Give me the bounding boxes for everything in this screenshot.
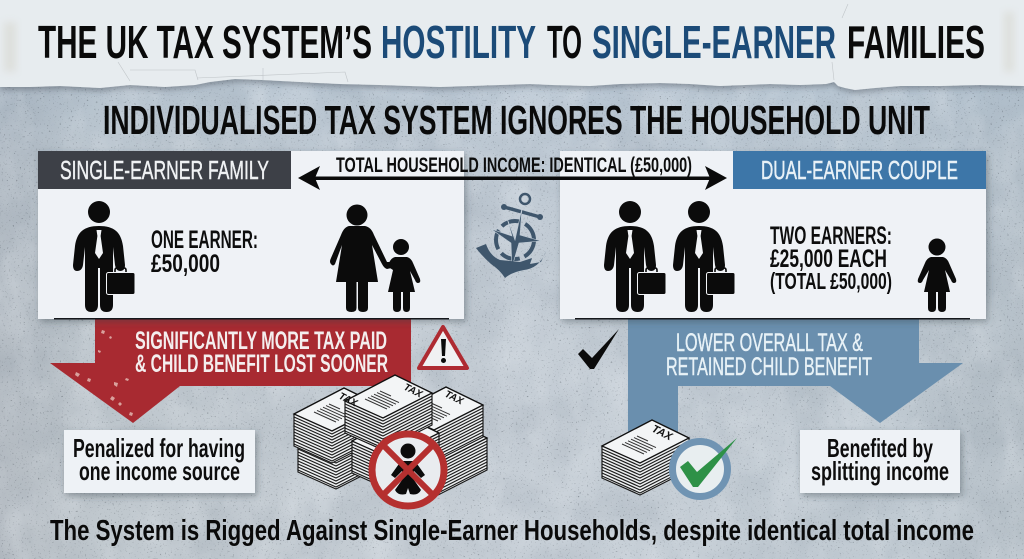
tax labels: TAX bbox=[402, 382, 425, 401]
icon: earner with briefcase bbox=[73, 201, 135, 312]
icon: child bbox=[918, 238, 956, 312]
tax labels bbox=[337, 382, 466, 410]
panel: single-earner family bbox=[38, 151, 464, 320]
icon: small tax stack with green check bbox=[602, 420, 737, 496]
callout: penalized bbox=[64, 430, 255, 493]
tax labels: TAX bbox=[337, 391, 360, 410]
title: THE UK TAX SYSTEM’S bbox=[38, 16, 372, 68]
red outcome arrow bbox=[50, 319, 411, 423]
icon: large stacks of tax papers with no-child sign bbox=[294, 375, 487, 506]
panel: dual-earner couple bbox=[560, 151, 986, 320]
text: two earners: (TOTAL £50,000) bbox=[770, 268, 892, 294]
callout: benefited bbox=[800, 430, 960, 493]
callout: benefited: splitting income bbox=[811, 456, 949, 486]
icon: small tax stack with green check: TAX bbox=[650, 423, 675, 444]
title bbox=[38, 16, 985, 68]
callout: benefited: Benefited by bbox=[827, 433, 933, 463]
blue outcome arrow bbox=[628, 319, 963, 445]
icon: warning triangle bbox=[419, 327, 467, 368]
arrow: double-headed income comparison bbox=[298, 166, 727, 190]
red arrow text: SIGNIFICANTLY MORE TAX PAID bbox=[135, 327, 387, 355]
header: single-earner family bbox=[38, 151, 291, 189]
text: two earners: £25,000 EACH bbox=[770, 245, 887, 273]
blue arrow text: LOWER OVERALL TAX & bbox=[676, 329, 863, 357]
icon: black check mark bbox=[578, 329, 619, 369]
callout: penalized: one income source bbox=[79, 456, 240, 486]
header: single-earner family: SINGLE-EARNER FAMILY bbox=[60, 155, 269, 185]
header: dual-earner couple bbox=[733, 151, 986, 189]
text: two earners: TWO EARNERS: bbox=[770, 222, 892, 250]
blue arrow text bbox=[666, 329, 872, 381]
text: one earner bbox=[151, 226, 258, 278]
title: SINGLE-EARNER bbox=[592, 16, 836, 68]
torn paper header strip bbox=[0, 0, 1024, 90]
text: one earner: £50,000 bbox=[151, 250, 220, 278]
red arrow text bbox=[135, 327, 388, 378]
tax labels: TAX bbox=[443, 389, 466, 408]
label: total household income: TOTAL HOUSEHOLD INCOME: IDENTICAL (£50,000) bbox=[336, 154, 692, 177]
icon: crossed-out baby bbox=[372, 434, 444, 506]
title: TO bbox=[547, 16, 582, 68]
blue arrow text: RETAINED CHILD BENEFIT bbox=[666, 353, 872, 381]
red arrow text: & CHILD BENEFIT LOST SOONER bbox=[135, 350, 388, 378]
callout: penalized: Penalized for having bbox=[73, 433, 245, 463]
icon: mother and child bbox=[330, 204, 420, 312]
title: HOSTILITY bbox=[381, 16, 536, 68]
icon: anchor with compass bbox=[476, 194, 546, 278]
icon: two earners with briefcases bbox=[604, 201, 735, 312]
text: two earners bbox=[770, 222, 892, 294]
text: one earner: ONE EARNER: bbox=[151, 226, 258, 254]
